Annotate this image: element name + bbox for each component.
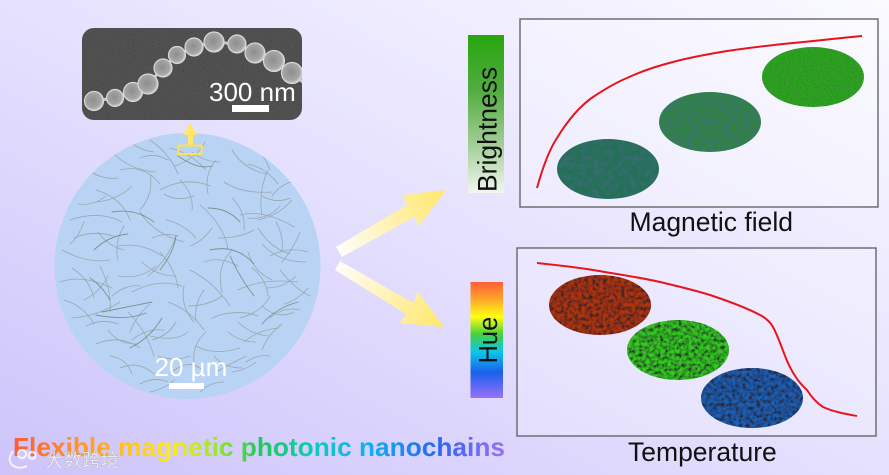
x-axis label: magnetic field: Magnetic field bbox=[630, 207, 793, 237]
x-axis label: temperature: Temperature bbox=[628, 437, 777, 467]
brightness label: Brightness bbox=[472, 67, 502, 192]
nanochain beads bbox=[84, 32, 305, 110]
SEM scale bar bbox=[232, 105, 269, 112]
panel: hue vs temperature chart bbox=[517, 248, 876, 436]
sample ellipse: red bbox=[549, 275, 651, 335]
nanochain fibers bbox=[60, 138, 310, 392]
panel: brightness vs magnetic field chart bbox=[520, 19, 878, 207]
red hue curve bbox=[537, 263, 857, 416]
sample ellipse: bright green bbox=[762, 47, 864, 107]
SEM inset panel bbox=[82, 28, 305, 120]
hue label: Hue bbox=[475, 317, 503, 364]
arrow: to magnetic field response bbox=[336, 190, 446, 257]
SEM scale label: 300 nm bbox=[209, 77, 296, 107]
hue scale bar bbox=[470, 282, 503, 398]
watermark bbox=[10, 450, 119, 471]
watermark text: 大数跨境 bbox=[45, 450, 119, 471]
sample ellipse: medium green bbox=[659, 92, 761, 152]
micrograph scale bar bbox=[169, 383, 204, 389]
red brightness curve bbox=[537, 36, 862, 188]
micrograph scale label: 20 µm bbox=[154, 352, 227, 382]
sample ellipse: blue bbox=[701, 368, 803, 428]
icon: watermark logo bbox=[10, 450, 36, 468]
brightness scale bar bbox=[468, 35, 504, 193]
sample ellipse: green bbox=[627, 320, 729, 380]
icon: small yellow zoom arrow and selection box bbox=[178, 123, 202, 154]
sample ellipse: dim green bbox=[557, 139, 659, 199]
micrograph circle bbox=[54, 133, 320, 399]
title: Flexible magnetic photonic nanochains bbox=[13, 432, 505, 462]
arrow: to temperature response bbox=[335, 261, 444, 327]
